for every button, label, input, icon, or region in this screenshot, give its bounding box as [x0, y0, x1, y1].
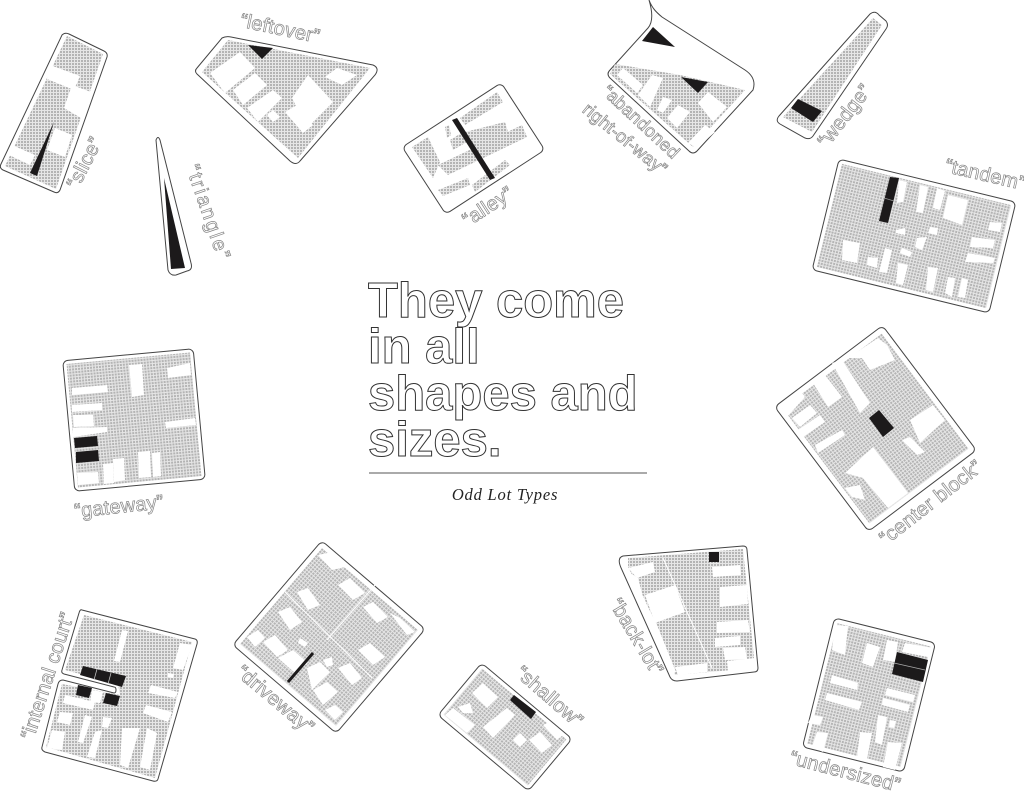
label: alley: “alley”: [459, 183, 517, 231]
label: internal court: “internal court”: [17, 610, 79, 742]
panel: back-lot: [605, 546, 758, 681]
panel: abandoned right-of-way lot: [579, 0, 754, 179]
label: abandoned right-of-way: right-of-way”: [579, 99, 671, 179]
black lot: driveway: [288, 653, 313, 682]
label: wedge: “wedge”: [814, 80, 876, 152]
label: leftover: “leftover”: [238, 10, 322, 48]
label: slice: “slice”: [63, 134, 107, 192]
black lot: upper triangle: [642, 27, 675, 47]
black lot: lower triangle: [681, 77, 708, 93]
black lots: internal court: [76, 666, 126, 706]
black lot: alley: [452, 118, 495, 180]
black lots: tandem: [879, 177, 899, 223]
title: They come: [368, 274, 624, 328]
title: in all: [368, 320, 480, 374]
title: shapes and: [368, 367, 638, 421]
panel: internal court lot: [17, 610, 197, 781]
black lot: shallow: [510, 695, 536, 719]
label: shallow: “shallow”: [511, 662, 587, 732]
panel: alley lot: [402, 83, 545, 231]
black lot: wedge: [791, 99, 822, 122]
panel: wedge lot: [777, 12, 888, 152]
black lots: gateway: [74, 436, 99, 463]
panel: leftover lot: [196, 10, 377, 164]
black lot: slice: [30, 122, 54, 176]
label: driveway: “driveway”: [232, 661, 318, 739]
subtitle: Odd Lot Types: [452, 485, 558, 504]
panel: center block lot: [775, 326, 987, 550]
black lot: triangle: [164, 178, 185, 269]
panel: gateway lot: [63, 349, 205, 523]
label: gateway: “gateway”: [73, 491, 165, 523]
label: back-lot: “back-lot”: [605, 595, 667, 679]
black lot: leftover: [248, 45, 273, 59]
black lot: back-lot: [709, 552, 719, 562]
label: triangle: “triangle”: [181, 162, 235, 264]
panel: slice lot: [0, 33, 107, 193]
black lot: center block: [869, 410, 894, 437]
label: center block: “center block”: [875, 456, 987, 550]
panel: undersized lot: [787, 618, 936, 795]
panel: shallow lot: [438, 662, 587, 791]
panel: driveway lot: [232, 541, 425, 739]
panel: triangle lot: [156, 138, 235, 275]
label: abandoned right-of-way: “abandoned: [598, 81, 684, 163]
black lots: undersized: [892, 652, 928, 682]
title: [368, 274, 638, 467]
panel: tandem lot: [812, 155, 1024, 313]
title: sizes.: [368, 413, 501, 467]
